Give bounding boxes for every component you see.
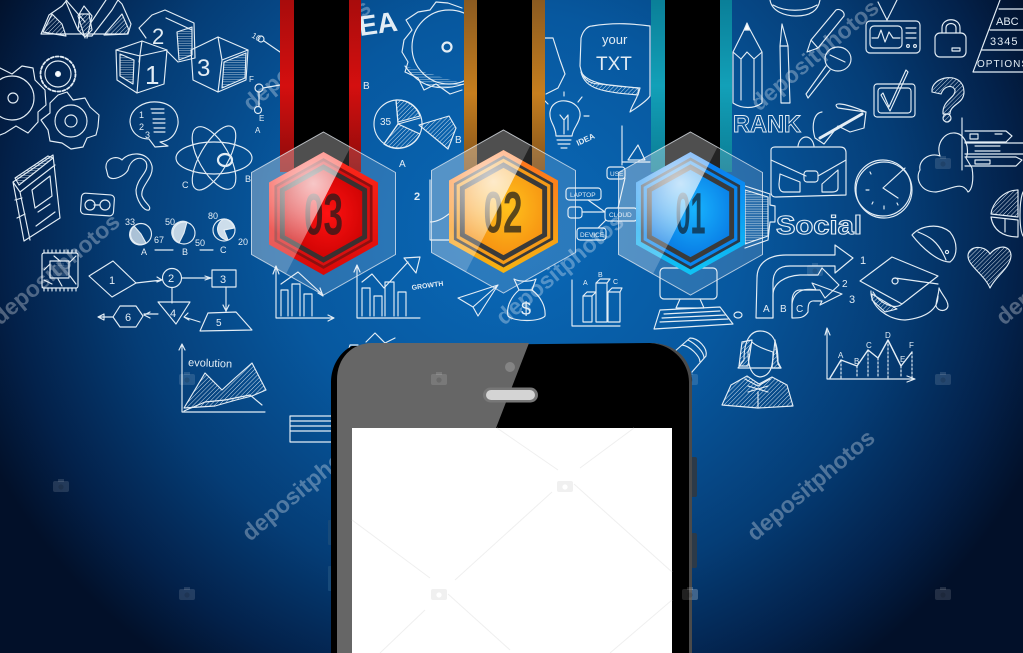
sketch: three pie gauges: 33	[125, 217, 135, 227]
sketch: three pie gauges: 50	[165, 217, 175, 227]
phone camera watermarks	[431, 372, 698, 600]
sketch: three pie gauges: B	[182, 247, 188, 257]
sketch: A–F line chart: E	[900, 355, 905, 364]
sketch: bar chart	[273, 266, 334, 321]
sketch: your text speech bubble: TXT	[596, 54, 632, 75]
sketch: evolution chart	[179, 344, 266, 412]
sketch: book stack beside badge 01	[745, 186, 775, 248]
sketch: three pie gauges	[125, 211, 248, 257]
sketch: padlock	[935, 20, 966, 57]
sketch: cloud flow chart: USE	[610, 171, 624, 178]
sketch: 3D bars chart	[572, 272, 622, 326]
sketch: businessman suit	[41, 0, 131, 38]
sketch: numbered blocks: 2	[152, 24, 164, 49]
sketch: signpost arrows	[962, 118, 1023, 170]
sketch: mountain behind phone	[345, 333, 395, 362]
sketch: atom: C	[182, 180, 189, 190]
sketch: heart	[968, 247, 1011, 288]
sketch: evolution chart: evolution	[188, 357, 232, 371]
sketch: pie chart: 35	[380, 117, 392, 128]
badge 03	[251, 131, 396, 296]
sketch: flow diagram: 6	[125, 312, 131, 324]
sketch: paper plane	[458, 285, 498, 316]
sketch: pie chart	[363, 81, 462, 170]
sketch: right pie	[991, 190, 1023, 237]
sketch: three branching arrows: B	[780, 304, 787, 315]
sketch: your text speech bubble: your	[602, 32, 628, 47]
sketch: flow diagram: 3	[220, 274, 226, 286]
sketch: list speech bubble: 1	[139, 110, 144, 120]
sketch: pie chart: B	[363, 81, 370, 92]
sketch: list speech bubble	[130, 102, 178, 147]
watermarks: depositphotos	[237, 424, 375, 546]
watermarks: depositphotos	[491, 208, 629, 330]
right edge	[650, 343, 692, 653]
sketch: flow diagram	[89, 261, 252, 331]
sketch: RANK lettering: RANK	[733, 111, 802, 138]
sketch: A–F line chart: C	[866, 341, 872, 350]
smartphone	[328, 343, 698, 653]
sketch: options pyramid: ABC	[996, 16, 1019, 28]
sketch: three pie gauges: 20	[238, 237, 248, 247]
sketch: atom	[176, 120, 252, 196]
sketch: question mark	[932, 78, 964, 122]
glass hexagon	[432, 130, 576, 293]
sketch: A–F line chart: A	[838, 351, 844, 360]
sketch: curly question mark	[106, 154, 152, 210]
sketch: three branching arrows: 2	[842, 279, 848, 290]
sketch: flow diagram: 4	[170, 308, 176, 320]
glass highlight	[252, 132, 350, 274]
sketch: options pyramid: 3345	[990, 36, 1018, 48]
sketch: Social lettering: Social	[776, 210, 862, 240]
sketch: light bulb	[544, 92, 596, 148]
sketch: cloud flow chart	[566, 167, 637, 240]
sketch: money bag	[508, 279, 545, 320]
sketch: grid chart behind badge 02	[414, 180, 480, 240]
screen watermark lines	[352, 428, 672, 653]
sketch: atom: B	[245, 174, 251, 184]
sketch: glasses	[813, 104, 866, 144]
sketch: growth chart: GROWTH	[411, 281, 444, 292]
sketch: three pie gauges: 67	[154, 235, 164, 245]
sketch: three branching arrows: C	[796, 304, 803, 315]
sketch: long pencil	[733, 23, 790, 108]
sketch: network nodes: A	[255, 126, 261, 135]
badge 01: 01	[676, 182, 706, 246]
sketch: flow diagram: 2	[168, 273, 174, 285]
watermark camera icons	[53, 156, 951, 600]
sketch: options pyramid	[973, 0, 1023, 72]
ribbon 02	[464, 0, 545, 170]
sketch: numbered blocks: 3	[197, 55, 210, 82]
sketch: cloud flow chart: DEVICE	[580, 232, 605, 239]
sketch: money bag: $	[521, 299, 531, 319]
glare	[337, 343, 529, 653]
side buttons	[328, 457, 697, 591]
sketch: microchip	[42, 250, 78, 291]
camera	[505, 362, 515, 372]
sketch: list speech bubble: 2	[139, 122, 144, 132]
sketch: pie chart: B	[455, 135, 462, 146]
sketch: large gear	[402, 2, 486, 94]
sketch: flow diagram: 5	[216, 318, 222, 329]
glass highlight	[618, 132, 718, 274]
coloured hexagon rings	[449, 150, 558, 273]
sketch: pen and magnifier	[806, 9, 851, 98]
sketch: cylinder behind phone	[674, 338, 706, 372]
sketch: A–F line chart: F	[909, 341, 914, 350]
sketch: EA title letters: EA	[357, 6, 399, 42]
sketch: list speech bubble: 3	[145, 130, 150, 140]
sketch: monitor and keyboard	[654, 268, 742, 329]
sketch: A–F line chart	[825, 328, 915, 382]
phone body	[331, 343, 692, 653]
glass hexagon	[252, 132, 396, 295]
sketch: retro TV	[866, 0, 920, 53]
sketch: pie chart: A	[399, 159, 406, 170]
sketch: briefcase	[771, 137, 846, 197]
sketch: numbered blocks: 1	[145, 60, 159, 90]
sketch: A–F line chart: D	[885, 331, 891, 340]
sketch: coin stack	[770, 0, 820, 16]
badge 01	[618, 131, 763, 296]
sketch: growth chart	[354, 257, 444, 318]
sketch: cloud	[918, 133, 973, 192]
sketch: three pie gauges: A	[141, 247, 147, 257]
sketch: three pie gauges: 80	[208, 211, 218, 221]
sketch: three pie gauges: 50	[195, 238, 205, 248]
sketch: three branching arrows: 3	[849, 294, 855, 306]
sketch: network nodes: F	[249, 75, 254, 84]
sketch: 3D bars chart: C	[613, 279, 618, 286]
glass highlight	[432, 130, 530, 272]
sketch: computer mouse	[912, 226, 956, 262]
sketch: network nodes: 10	[250, 31, 263, 43]
sketch: numbered blocks	[116, 10, 248, 93]
sketch: your text speech bubble	[580, 24, 650, 112]
coloured hexagon rings	[636, 152, 745, 275]
sketch: grid chart behind badge 02: 2	[414, 191, 420, 203]
number: 02	[484, 180, 522, 246]
sketch: 3D bars chart: A	[583, 280, 588, 287]
screen	[352, 428, 672, 653]
sketch: small axis chart behind glass	[622, 126, 650, 165]
sketch: flow diagram: 1	[109, 275, 115, 287]
sketch: three branching arrows	[756, 245, 866, 318]
sketch: GO tag	[80, 193, 115, 216]
sketch: cloud flow chart: LAPTOP	[570, 192, 596, 199]
sketch: notes pad behind phone	[290, 416, 331, 442]
sketch: three branching arrows: 1	[860, 255, 866, 267]
sketch: puzzle shape	[544, 38, 565, 94]
badge 02	[431, 129, 576, 294]
ribbon 01	[651, 0, 732, 172]
coloured hexagon rings	[269, 152, 378, 275]
watermarks: depositphotos	[742, 424, 880, 546]
number: 03	[304, 182, 343, 248]
sketch: book	[13, 155, 60, 241]
sketch: three pie gauges: C	[220, 245, 227, 255]
sketch: gears	[0, 56, 99, 149]
sketch: three branching arrows: A	[763, 304, 770, 315]
sketch: clock	[855, 160, 912, 218]
sketch: 3D bars chart: B	[598, 272, 603, 279]
sketch: light bulb: IDEA	[575, 131, 596, 148]
sketch: graduation cap	[860, 257, 948, 320]
sketch: cloud flow chart: CLOUD	[609, 212, 632, 219]
ribbon 03	[280, 0, 361, 172]
sketch: A–F line chart: B	[854, 357, 859, 366]
sketch: businesswoman	[722, 331, 793, 408]
sketch: network nodes: E	[259, 114, 264, 123]
sketch: network nodes	[249, 31, 280, 135]
glass hexagon	[618, 132, 762, 295]
speaker	[483, 388, 538, 402]
sketch: check box	[874, 70, 915, 117]
